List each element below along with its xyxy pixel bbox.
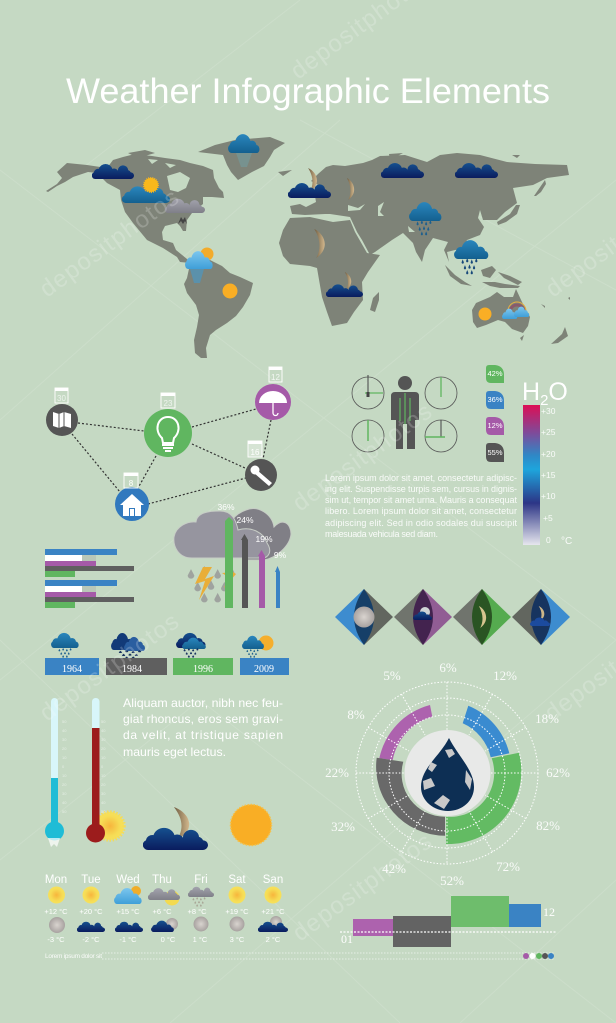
- text block: Aliquam: [123, 696, 283, 759]
- icon: sun Australia: [478, 308, 492, 320]
- arrow: 24% dark: 24%: [236, 515, 254, 525]
- day: Wednesday: Wed: [116, 874, 140, 886]
- percentage labels: 12%: [493, 668, 517, 683]
- tag: 55%: 55%: [487, 448, 503, 457]
- calendar: 30: 30: [57, 394, 66, 403]
- thermometer: cold: 30: [62, 791, 67, 796]
- day: Thursday: +6 °C: [152, 907, 172, 916]
- horizontal bar chart: [45, 549, 134, 608]
- thermometer: cold: [45, 698, 67, 847]
- day: Friday: 1 °C: [193, 935, 208, 944]
- year 2009: 2009: [254, 664, 274, 675]
- icon: sunflower behind thermometer: [96, 812, 124, 840]
- icon: sun Brazil: [222, 284, 238, 298]
- icon: night cloud Europe: [288, 168, 331, 198]
- year history: [45, 633, 289, 675]
- percentage labels: 42%: [382, 861, 406, 876]
- segment: green: [446, 753, 521, 844]
- footer caption: Lorem ipsum dolor sit: [45, 953, 102, 960]
- tag: 12%: 12%: [487, 421, 503, 430]
- arrow: 19% purple: 19%: [255, 534, 273, 544]
- percentage labels: 52%: [440, 873, 464, 888]
- icon: sun and cloud Venezuela: [185, 248, 214, 283]
- thermometer: hot: 50: [101, 809, 106, 814]
- calendar: 12: 12: [271, 373, 280, 382]
- thermometer: cold: 40: [62, 800, 67, 805]
- icon: gray cloud USA: [165, 199, 205, 224]
- center circle: [404, 730, 490, 816]
- watermark: depositphotos: [35, 608, 184, 727]
- title: Weather Infographic Elements: [66, 72, 550, 111]
- year 1964: 1964: [62, 664, 82, 675]
- diamond: crescent moon: [453, 589, 511, 645]
- radial chart: [325, 660, 570, 888]
- scale labels: +30: [541, 406, 556, 416]
- thermometer: cold: 0: [62, 764, 65, 769]
- icon: night cloud Russia: [381, 163, 424, 178]
- tag: 36%: 36%: [487, 395, 503, 404]
- segment: dark gray: [376, 758, 445, 836]
- paragraph: Lorem ipsum: ing elit. Suspendisse turpis sem, cursus in dignis-: [325, 484, 517, 494]
- year 1984: 1984: [122, 664, 142, 675]
- paragraph: Lorem ipsum: malesuada vehicula sed diam.: [325, 529, 438, 539]
- weekly forecast: [44, 874, 288, 944]
- storm cloud with arrows: [174, 502, 291, 608]
- icon: night cloud Alaska: [92, 164, 134, 179]
- thermometer: hot: [86, 698, 124, 842]
- icon: rain cloud South-East Asia: [454, 240, 488, 274]
- icon: rainbow cloud Australia: [502, 302, 529, 319]
- paragraph: Lorem ipsum: Lorem ipsum dolor sit amet, consectetur adipisc-: [325, 473, 517, 483]
- footer line: [45, 953, 555, 960]
- icon: night cloud Siberia: [455, 163, 498, 178]
- rain and lightning: [188, 566, 236, 602]
- arrow: 36% green: 36%: [217, 502, 235, 512]
- H2O heading: H: [522, 378, 540, 406]
- calendar: 12: [269, 367, 282, 382]
- node: umbrella: [255, 384, 291, 420]
- day: Sunday: +21 °C: [261, 907, 285, 916]
- year 2009: [240, 636, 289, 675]
- calendar: 23: 23: [164, 399, 173, 408]
- world map: [46, 137, 570, 358]
- paragraph: Lorem ipsum: sim ut, tempor sit amet urna. Mauris a consequat: [325, 495, 517, 505]
- year 1964: [45, 633, 99, 675]
- percentage labels: 72%: [496, 859, 520, 874]
- day: Friday: Fri: [194, 874, 208, 886]
- day: Monday: -3 °C: [47, 935, 65, 944]
- percentage tags: [486, 365, 504, 462]
- moon phase diamonds: [335, 589, 570, 645]
- thermometer: hot: 40: [101, 728, 106, 733]
- day: Monday: +12 °C: [44, 907, 68, 916]
- day: Saturday: 3 °C: [230, 935, 245, 944]
- icon: rain cloud China: [409, 202, 441, 235]
- percentage labels: 8%: [347, 707, 365, 722]
- day: Tuesday: +20 °C: [79, 907, 103, 916]
- thermometer: hot: 50: [101, 719, 106, 724]
- icon: sun over Canada: [144, 178, 158, 192]
- step bar chart: 01: [341, 932, 353, 946]
- text block: Aliquam: da velit, at tristique sapien: [123, 728, 283, 742]
- thermometer: cold: 50: [62, 719, 67, 724]
- percentage labels: 82%: [536, 818, 560, 833]
- day: Tuesday: Tue: [81, 874, 101, 886]
- day: Monday: Mon: [45, 874, 67, 886]
- thermometer: hot: 0: [101, 764, 104, 769]
- percentage labels: 18%: [535, 711, 559, 726]
- paragraph: Lorem ipsum: libero. Lorem ipsum dolor sit amet, consectetur: [325, 506, 517, 516]
- icon: moon East Europe: [347, 178, 354, 200]
- watermark: depositphotos: [288, 828, 437, 947]
- scale labels: +20: [541, 449, 556, 459]
- clocks and person: [352, 375, 457, 452]
- thermometer: hot: 20: [101, 782, 106, 787]
- scale labels: +5: [543, 513, 553, 523]
- day: Wednesday: -1 °C: [119, 935, 137, 944]
- calendar: 16: [248, 441, 262, 457]
- day: Saturday: +19 °C: [225, 907, 249, 916]
- day: Wednesday: [114, 874, 143, 944]
- clock 2: [425, 377, 457, 409]
- thermometer: hot: 20: [101, 746, 106, 751]
- tag: 42%: 42%: [487, 369, 503, 378]
- H2O heading: O: [548, 378, 568, 406]
- icon: night cloud Central Africa: [326, 272, 363, 297]
- H2O temperature scale: [522, 378, 572, 547]
- day: Wednesday: +15 °C: [116, 907, 140, 916]
- thermometer: hot: 40: [101, 800, 106, 805]
- year 1996: [173, 633, 233, 675]
- gradient bar: [523, 405, 540, 545]
- H2O heading: 2: [540, 392, 548, 409]
- map weather icons: [92, 134, 529, 320]
- calendar: 8: 8: [129, 479, 134, 488]
- globe drop: [421, 738, 474, 811]
- icon: large moon and cloud: [143, 807, 208, 850]
- day: Thursday: Thu: [152, 874, 172, 886]
- thermometer: cold: 30: [62, 737, 67, 742]
- icon: person: [391, 376, 419, 449]
- scale labels: 0: [546, 535, 551, 545]
- diamond: crescent moon with cloud: [512, 589, 570, 645]
- day: Sunday: 2 °C: [266, 935, 281, 944]
- day: Sunday: [258, 874, 288, 944]
- day: Monday: [44, 874, 68, 944]
- node: light bulb: [144, 409, 192, 457]
- scale labels: [541, 406, 572, 547]
- year 1996: 1996: [193, 664, 213, 675]
- calendar: 16: 16: [251, 448, 260, 457]
- icon: large sun: [230, 804, 272, 846]
- diamond: night cloud: [394, 589, 452, 645]
- node: map: [46, 404, 78, 436]
- text block: Aliquam: Aliquam auctor, nibh nec feu-: [123, 696, 283, 710]
- text block: Aliquam: giat rhoncus, eros sem gravi-: [123, 712, 283, 726]
- thermometer: cold: 10: [62, 773, 67, 778]
- paragraph: Lorem ipsum: adipiscing elit. Sed in odio sodales dui suscipit: [325, 518, 517, 528]
- storm cloud: [174, 509, 291, 574]
- day: Friday: [187, 874, 214, 944]
- percentage labels: 22%: [325, 765, 349, 780]
- scale labels: +25: [541, 427, 556, 437]
- thermometer: cold: 20: [62, 746, 67, 751]
- thermometer: hot: 30: [101, 791, 106, 796]
- icon: moon Africa: [314, 229, 325, 258]
- node: home: [115, 487, 149, 521]
- step bar chart: 12: [543, 905, 555, 919]
- thermometer: cold: 20: [62, 782, 67, 787]
- clock 3: [352, 420, 384, 452]
- dotted grid: [356, 682, 538, 864]
- thermometer: hot: 10: [101, 773, 106, 778]
- arrow: 9% blue: 9%: [274, 550, 287, 560]
- icon: blue cloud Greenland: [228, 134, 259, 167]
- calendar: 23: [161, 393, 175, 408]
- thermometer: cold: 40: [62, 728, 67, 733]
- step bar chart: [340, 896, 557, 947]
- watermark: depositphotos: [35, 184, 184, 303]
- percentage labels: 6%: [439, 660, 457, 675]
- diamond: full moon: [335, 589, 393, 645]
- percentage labels: [325, 660, 570, 888]
- year 1984: [106, 633, 167, 675]
- day: Thursday: 0 °C: [161, 935, 176, 944]
- network diagram: [46, 367, 291, 521]
- percentage labels: 32%: [331, 819, 355, 834]
- calendar: 30: [55, 388, 68, 403]
- thermometer: hot: 10: [101, 755, 106, 760]
- day: Sunday: San: [263, 874, 283, 886]
- scale labels: +10: [541, 491, 556, 501]
- text block: Aliquam: mauris eget lectus.: [123, 745, 226, 759]
- watermark: depositphotos: [288, 398, 437, 517]
- thermometer: cold: 10: [62, 755, 67, 760]
- day: Tuesday: -2 °C: [82, 935, 100, 944]
- segment: blue: [463, 706, 509, 757]
- day: Saturday: Sat: [228, 874, 246, 886]
- thermometer: hot: 30: [101, 737, 106, 742]
- node: key: [245, 459, 277, 491]
- scale labels: +15: [541, 470, 556, 480]
- calendar: 8: [124, 473, 138, 488]
- legend dots: [523, 953, 554, 959]
- day: Saturday: [225, 874, 249, 944]
- clock 4: [425, 420, 457, 452]
- paragraph: Lorem ipsum: [325, 473, 517, 539]
- day: Thursday: [148, 874, 180, 944]
- scale labels: °C: [561, 536, 572, 547]
- thermometer: cold: 50: [62, 809, 67, 814]
- day: Tuesday: [77, 874, 105, 944]
- percentage labels: 5%: [383, 668, 401, 683]
- percentage labels: 62%: [546, 765, 570, 780]
- segment: purple: [379, 705, 432, 760]
- day: Friday: +8 °C: [187, 907, 207, 916]
- icon: blue cloud Canada: [122, 186, 170, 203]
- clock 1: [352, 375, 384, 409]
